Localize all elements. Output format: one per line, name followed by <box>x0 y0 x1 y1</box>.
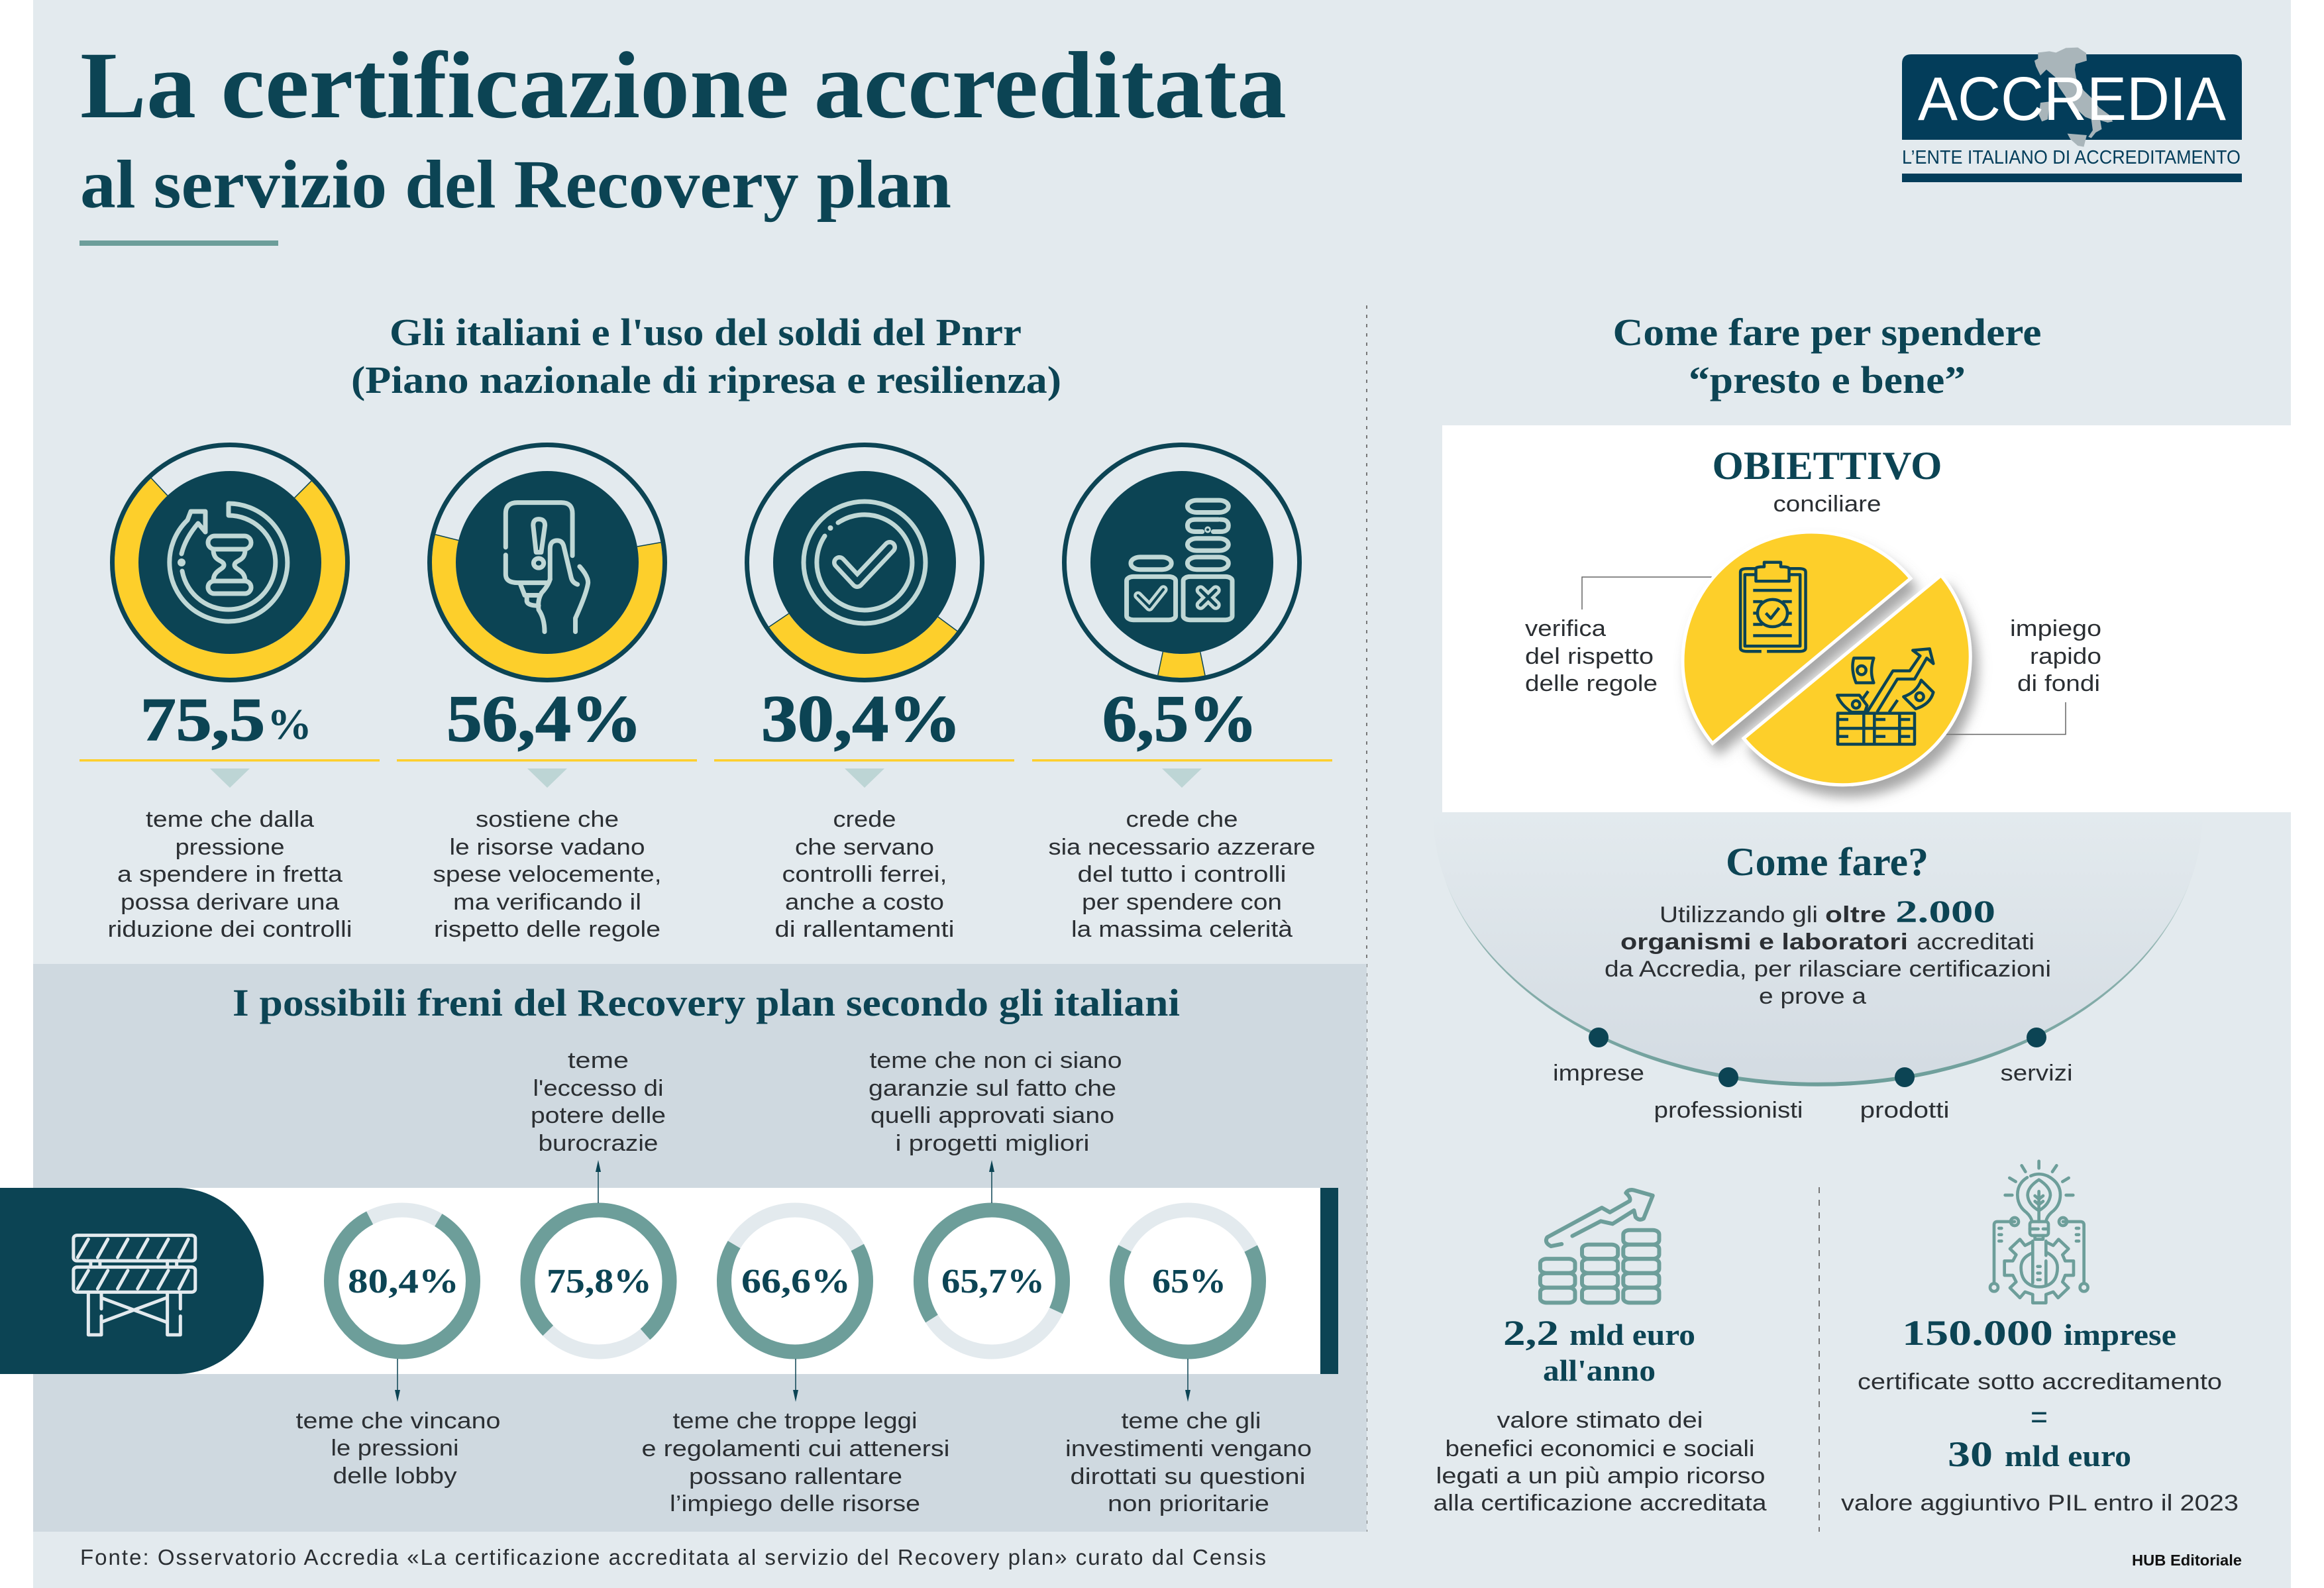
donut 65% <box>1065 1186 1312 1516</box>
heading: come fare per spendere: “presto e bene” <box>1689 358 1966 401</box>
gauge: 75,5% <box>83 416 376 709</box>
donut 80,4%: teme che vincano <box>295 1408 501 1434</box>
gauge: 30,4% <box>720 418 1009 707</box>
dotted divider bottom right <box>1819 1187 1820 1532</box>
stat 6,5%: 6,5% <box>1102 682 1257 755</box>
donut 75,8%: l'eccesso di <box>533 1076 664 1101</box>
panel: obiettivo: conciliare <box>1773 492 1881 517</box>
block: 2,2 mld euro: mld euro <box>1569 1318 1695 1351</box>
label: impiego <box>2010 616 2101 696</box>
heading: come fare per spendere: Come fare per spendere <box>1612 311 2042 354</box>
donut 66,6% <box>641 1185 950 1516</box>
gauge: 6,5% <box>1060 441 1304 684</box>
stat 30,4%: 30,4% <box>761 682 961 755</box>
donut 65,7%: i progetti migliori <box>896 1131 1089 1156</box>
icon: clipboard <box>1740 562 1806 651</box>
block: 2,2 mld euro <box>1434 1190 1767 1516</box>
panel: come fare: da Accredia, per rilasciare certificazioni <box>1605 957 2051 982</box>
stat 30,4%: di rallentamenti <box>775 917 954 942</box>
white strip <box>0 1188 1320 1374</box>
label: verifica: verifica <box>1525 616 1607 641</box>
dots and labels: imprese <box>1553 1061 1644 1086</box>
half circle: fondi <box>1744 575 1970 785</box>
dots and labels <box>1553 1028 2072 1123</box>
stat 56,4%: 56,4% <box>447 682 642 755</box>
panel: come fare: oltre <box>1825 902 1886 927</box>
donut 75,8% <box>498 1048 699 1381</box>
stat 30,4%: crede <box>833 807 896 832</box>
stat 56,4%: ma verificando il <box>453 890 641 915</box>
block: 2,2 mld euro: legati a un più ampio ricorso <box>1436 1463 1765 1489</box>
icon: hand holding phone with alert <box>505 503 588 632</box>
panel: come fare: organismi e laboratori <box>1620 929 1908 955</box>
panel: obiettivo: OBIETTIVO <box>1712 444 1942 488</box>
donut 75,8%: teme <box>568 1048 629 1073</box>
logo: Accredia <box>1902 48 2242 182</box>
icon: coin stacks with arrow <box>1540 1190 1659 1302</box>
donut 66,6%: 66,6% <box>741 1263 851 1300</box>
donut 65,7% <box>869 1048 1122 1379</box>
label: verifica <box>1525 616 1658 696</box>
donut 65%: dirottati su questioni <box>1071 1464 1305 1489</box>
title: al servizio del Recovery plan <box>80 146 951 223</box>
stat 75,5%: possa derivare una <box>121 890 340 915</box>
block: 2,2 mld euro: valore stimato dei <box>1497 1408 1703 1433</box>
stat 75,5%: pressione <box>175 835 285 860</box>
source note: Fonte: Osservatorio Accredia «La certificazione accreditata al servizio del Recovery plan» curato dal Censis <box>80 1545 1266 1569</box>
heading: Gli italiani e l'uso dei soldi: (Piano nazionale di ripresa e resilienza) <box>351 358 1061 401</box>
stat 75,5%: 75,5 <box>140 686 265 753</box>
gauge: 56,4% <box>427 443 667 682</box>
donut 65%: non prioritarie <box>1108 1491 1269 1516</box>
label: verifica: del rispetto <box>1525 644 1654 669</box>
label: impiego: impiego <box>2010 616 2101 641</box>
stat 6,5%: per spendere con <box>1082 890 1282 915</box>
stat 30,4%: controlli ferrei, <box>782 862 947 887</box>
stat 6,5%: crede che <box>1126 807 1238 832</box>
connector lines <box>1582 577 2066 734</box>
heading: Gli italiani e l'uso dei soldi <box>351 311 1061 401</box>
donut 66,6%: e regolamenti cui attenersi <box>641 1436 950 1461</box>
donut 80,4% <box>295 1184 501 1489</box>
panel: come fare: Come fare? <box>1726 840 1928 884</box>
donut 66,6%: l’impiego delle risorse <box>670 1491 920 1516</box>
block: 2,2 mld euro: benefici economici e sociali <box>1446 1436 1754 1461</box>
credit: HUB Editoriale <box>2132 1552 2242 1569</box>
logo: Accredia: L’ENTE ITALIANO DI ACCREDITAMENTO <box>1902 147 2241 168</box>
stat 56,4%: sostiene che <box>476 807 619 832</box>
heading: Gli italiani e l'uso dei soldi: Gli italiani e l'uso del soldi del Pnrr <box>390 311 1022 354</box>
label: impiego: rapido <box>2030 644 2101 669</box>
panel: come fare: e prove a <box>1759 984 1867 1009</box>
panel: come fare: 2.000 <box>1895 894 1995 929</box>
dots and labels: professionisti <box>1654 1098 1803 1123</box>
donut 80,4%: le pressioni <box>331 1436 458 1461</box>
stat 75,5%: a spendere in fretta <box>117 862 343 887</box>
donut 66,6%: teme che troppe leggi <box>673 1408 917 1434</box>
donut 80,4%: 80,4% <box>348 1263 459 1300</box>
heading: come fare per spendere <box>1612 311 2042 401</box>
donut 75,8%: burocrazie <box>538 1131 659 1156</box>
block: 150.000 imprese: mld euro <box>2005 1439 2131 1473</box>
block: 150.000 imprese: 150.000 <box>1902 1313 2053 1353</box>
donut 80,4%: delle lobby <box>333 1463 457 1489</box>
panel: come fare: accreditati <box>1917 929 2034 955</box>
donut 65%: investimenti vengano <box>1065 1436 1312 1461</box>
block: 150.000 imprese: imprese <box>2064 1318 2176 1351</box>
block: 150.000 imprese: = <box>2031 1400 2048 1435</box>
block: 2,2 mld euro: 2,2 <box>1503 1313 1559 1353</box>
donut 65,7%: teme che non ci siano <box>869 1048 1122 1073</box>
donut 66,6%: possano rallentare <box>689 1464 902 1489</box>
stat 30,4% <box>714 682 1014 942</box>
block: 2,2 mld euro: alla certificazione accreditata <box>1434 1491 1767 1516</box>
dotted divider main <box>1366 305 1367 1532</box>
half circle: regole <box>1683 532 1911 743</box>
title <box>79 33 1287 246</box>
block: 150.000 imprese: valore aggiuntivo PIL entro il 2023 <box>1841 1491 2239 1516</box>
stat 75,5%: teme che dalla <box>146 807 315 832</box>
stat 6,5%: sia necessario azzerare <box>1048 835 1316 860</box>
stat 75,5%: riduzione dei controlli <box>107 917 352 942</box>
dark barrier tab <box>0 1188 264 1374</box>
stat 56,4%: rispetto delle regole <box>434 917 660 942</box>
panel: come fare: Utilizzando gli <box>1660 902 1818 927</box>
donut 65%: 65% <box>1152 1263 1226 1300</box>
icon: light bulb and gear <box>1990 1161 2088 1303</box>
heading: freni: I possibili freni del Recovery plan secondo gli italiani <box>233 981 1180 1024</box>
block: 150.000 imprese: certificate sotto accreditamento <box>1858 1369 2222 1395</box>
label: verifica: delle regole <box>1525 671 1658 696</box>
donut 65,7%: 65,7% <box>941 1263 1045 1300</box>
donut 65,7%: quelli approvati siano <box>871 1103 1114 1128</box>
icon: hourglass with circular arrow <box>170 503 288 621</box>
block: 150.000 imprese <box>1841 1161 2239 1516</box>
icon: money and growth arrow <box>1837 649 1933 744</box>
stat 56,4%: spese velocemente, <box>433 862 661 887</box>
stat 56,4% <box>397 682 697 942</box>
title: La certificazione accreditata <box>80 33 1287 138</box>
donut 75,8%: potere delle <box>531 1103 666 1128</box>
panel: possibili freni <box>0 964 1367 1532</box>
icon: check and cross boxes <box>1127 500 1232 620</box>
stat 30,4%: anche a costo <box>785 890 944 915</box>
stat 6,5%: la massima celerità <box>1071 917 1293 942</box>
dots and labels: servizi <box>2001 1061 2072 1086</box>
stat 75,5%: % <box>267 700 312 749</box>
block: 150.000 imprese: 30 <box>1948 1434 1993 1474</box>
stat 56,4%: le risorse vadano <box>449 835 645 860</box>
donut 75,8%: 75,8% <box>547 1263 652 1300</box>
logo: Accredia: ACCREDIA <box>1918 64 2226 133</box>
donut 65,7%: garanzie sul fatto che <box>869 1076 1116 1101</box>
icon: check in circle <box>804 502 925 623</box>
stat 6,5% <box>1032 682 1332 942</box>
stat 75,5% <box>79 686 380 942</box>
dots and labels: prodotti <box>1860 1098 1949 1123</box>
icon: road barrier <box>74 1236 195 1335</box>
block: 2,2 mld euro: all'anno <box>1543 1353 1656 1387</box>
label: impiego: di fondi <box>2017 671 2100 696</box>
right end bar <box>1320 1188 1338 1374</box>
stat 6,5%: del tutto i controlli <box>1077 862 1287 887</box>
stat 30,4%: che servano <box>795 835 934 860</box>
panel: obiettivo <box>1442 425 2291 812</box>
panel: come fare <box>1433 812 2203 1123</box>
donut 65%: teme che gli <box>1121 1408 1261 1434</box>
